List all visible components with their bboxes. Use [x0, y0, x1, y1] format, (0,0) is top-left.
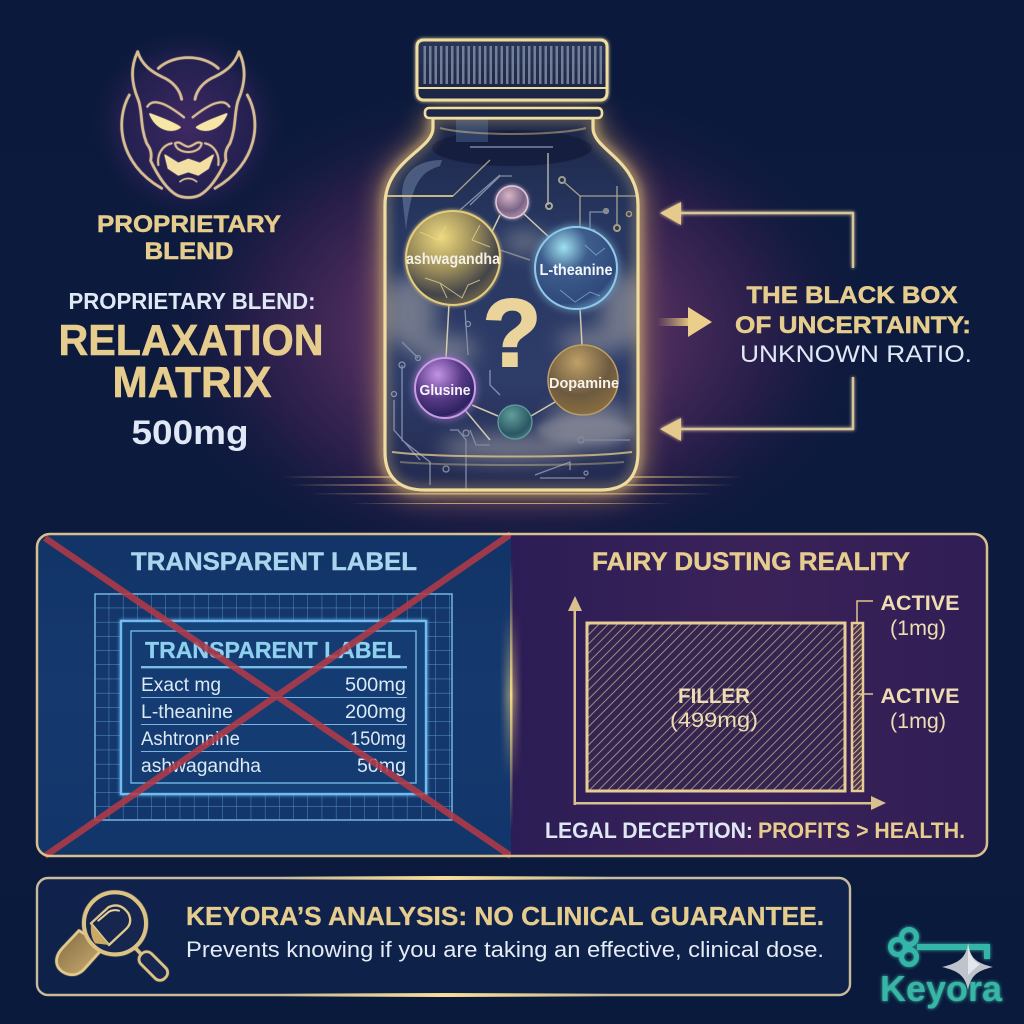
connector lines: [446, 214, 582, 440]
jar halo: [385, 118, 638, 490]
panel frame: [37, 534, 987, 856]
callout: black box: UNKNOWN RATIO.: [740, 341, 972, 368]
panel: keyora analysis: [37, 876, 850, 997]
sphere: L-theanine: [535, 227, 617, 309]
red cross: [45, 534, 511, 856]
callout: black box: [735, 282, 972, 368]
caption: legal deception: PROFITS > HEALTH.: [758, 818, 965, 843]
nutrition table: 200mg: [345, 702, 406, 723]
chart: filler vs active: [568, 592, 960, 810]
heading: proprietary blend small: BLEND: [144, 238, 234, 265]
nutrition table: Ashtronnine: [141, 729, 240, 750]
nutrition table: ashwagandha: [141, 756, 261, 777]
callout: black box: THE BLACK BOX: [746, 282, 958, 309]
sphere: ashwagandha: [406, 211, 500, 305]
logo: Keyora: [880, 930, 1003, 1009]
sphere: Glusine: [415, 358, 475, 418]
arrow: middle: [657, 307, 712, 337]
handle: [136, 948, 141, 954]
nutrition table: 500mg: [345, 675, 406, 696]
analysis title: KEYORA’S ANALYSIS: NO CLINICAL GUARANTEE.: [186, 901, 824, 931]
capsule in lens: [91, 905, 130, 945]
jar outline: [385, 118, 638, 490]
heading: transparent label: TRANSPARENT LABEL: [131, 548, 417, 576]
jar: [380, 40, 649, 490]
icon: key: [890, 930, 990, 964]
lens: [84, 892, 146, 954]
caption: legal deception: LEGAL DECEPTION:: [545, 818, 753, 843]
foreground cloud: [537, 417, 633, 443]
bar: active: [852, 623, 863, 791]
heading: fairy dusting: FAIRY DUSTING REALITY: [592, 548, 910, 576]
heading: relaxation matrix 500mg: PROPRIETARY BLEND:: [68, 288, 316, 314]
sphere: L-theanine: L-theanine: [540, 262, 613, 279]
label: filler: [670, 685, 758, 732]
analysis text: Prevents knowing if you are taking an effective, clinical dose.: [186, 937, 824, 962]
jar contents: [380, 118, 649, 490]
connector lines: [857, 601, 873, 694]
chart axes: [568, 596, 886, 810]
icon: demon mask: [122, 52, 255, 197]
icon: magnifier with capsule: [57, 892, 170, 983]
wordmark: Keyora: [880, 968, 1003, 1009]
caption: legal deception: [545, 818, 965, 843]
heading: relaxation matrix 500mg: MATRIX: [112, 358, 272, 407]
nutrition table: TRANSPARENT LABEL: [145, 637, 401, 663]
label: active: ACTIVE: [880, 592, 960, 615]
jar base lines: [280, 476, 744, 504]
heading: relaxation matrix 500mg: RELAXATION: [58, 316, 324, 365]
panel: transparent label: [37, 534, 511, 856]
smoke clouds: [380, 232, 649, 462]
sphere: teal: [498, 405, 532, 439]
jar glass: [385, 118, 638, 490]
label: active: (1mg): [890, 710, 946, 733]
label: active: (1mg): [890, 617, 946, 640]
heading: relaxation matrix 500mg: [58, 288, 324, 452]
capsule body: [57, 931, 104, 975]
sphere: ashwagandha: ashwagandha: [406, 251, 500, 268]
heading: relaxation matrix 500mg: 500mg: [132, 414, 248, 452]
circuit lines: [385, 153, 638, 490]
callout: black box: OF UNCERTAINTY:: [735, 312, 971, 339]
jar wide halo: [385, 118, 638, 490]
nutrition table: 50mg: [357, 756, 406, 777]
question mark: ?: [483, 280, 541, 387]
jar details: [385, 128, 632, 465]
sphere: Dopamine: Dopamine: [549, 375, 619, 392]
heading: proprietary blend small: PROPRIETARY: [97, 211, 281, 238]
label grid: [95, 594, 452, 820]
label: active: [880, 592, 960, 733]
arrow: bottom: [660, 377, 853, 441]
bar: filler: [587, 623, 845, 791]
label: filler: (499mg): [670, 709, 758, 732]
nutrition table: [141, 637, 407, 777]
neck ring: [425, 108, 602, 118]
icon: sparkle: [942, 943, 993, 990]
sphere: Dopamine: [548, 345, 619, 415]
sphere: Glusine: Glusine: [420, 382, 470, 399]
label: filler: FILLER: [678, 685, 750, 708]
cap: [417, 40, 607, 100]
arrow: top: [660, 202, 853, 268]
heading: proprietary blend small: [97, 211, 281, 265]
nutrition table: L-theanine: [141, 702, 233, 723]
label: active: ACTIVE: [880, 685, 960, 708]
panel: fairy dusting reality: [511, 534, 987, 856]
nutrition table: 150mg: [350, 729, 406, 750]
sphere: top: [496, 186, 528, 218]
nutrition table: Exact mg: [141, 675, 221, 696]
inner side glow: [385, 118, 638, 490]
